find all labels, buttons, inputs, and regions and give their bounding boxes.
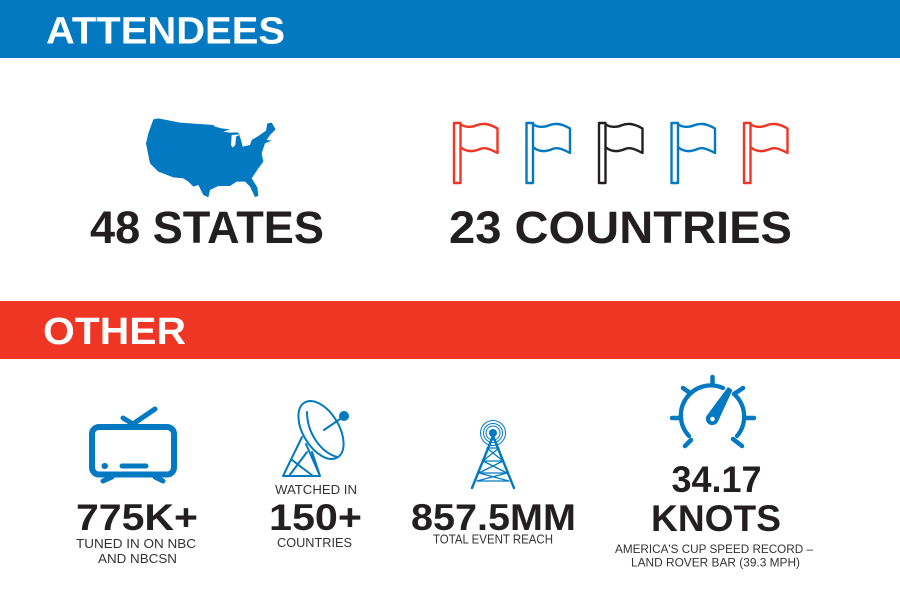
caption: speed record: LAND ROVER BAR (39.3 MPH)	[631, 558, 800, 570]
caption: total event reach: TOTAL EVENT REACH	[433, 532, 553, 546]
stat: 775K+: 775K+	[76, 496, 198, 538]
caption: tuned in: TUNED IN ON NBC	[76, 537, 196, 551]
stat: 48 states: 48 STATES	[90, 202, 324, 253]
panel: other header	[0, 301, 900, 359]
caption: countries: COUNTRIES	[277, 536, 352, 550]
text: watched in: WATCHED IN	[275, 483, 357, 497]
heading: other: OTHER	[43, 311, 186, 353]
stat: knots: KNOTS	[651, 497, 781, 539]
caption: tuned in: AND NBCSN	[98, 552, 177, 566]
icon: black flag	[599, 123, 642, 183]
icon: row of flags	[454, 123, 788, 183]
icon: speedometer	[672, 377, 754, 446]
stat: 34.17: 34.17	[672, 459, 762, 500]
caption: speed record: AMERICA'S CUP SPEED RECORD –	[615, 544, 814, 556]
icon: red flag	[454, 123, 498, 183]
icon: blue flag	[526, 123, 570, 183]
icon: broadcast tower	[472, 420, 514, 488]
icon: blue flag	[672, 123, 715, 183]
stat: 857.5MM: 857.5MM	[411, 496, 576, 538]
icon: US map	[146, 118, 276, 197]
stat: 23 countries: 23 COUNTRIES	[449, 202, 792, 253]
heading: attendees: ATTENDEES	[46, 10, 285, 52]
icon: television	[92, 409, 174, 481]
panel: attendees header	[0, 0, 900, 58]
icon: red flag	[744, 123, 788, 183]
icon: satellite dish	[283, 393, 353, 476]
stat: 150+: 150+	[269, 496, 362, 538]
